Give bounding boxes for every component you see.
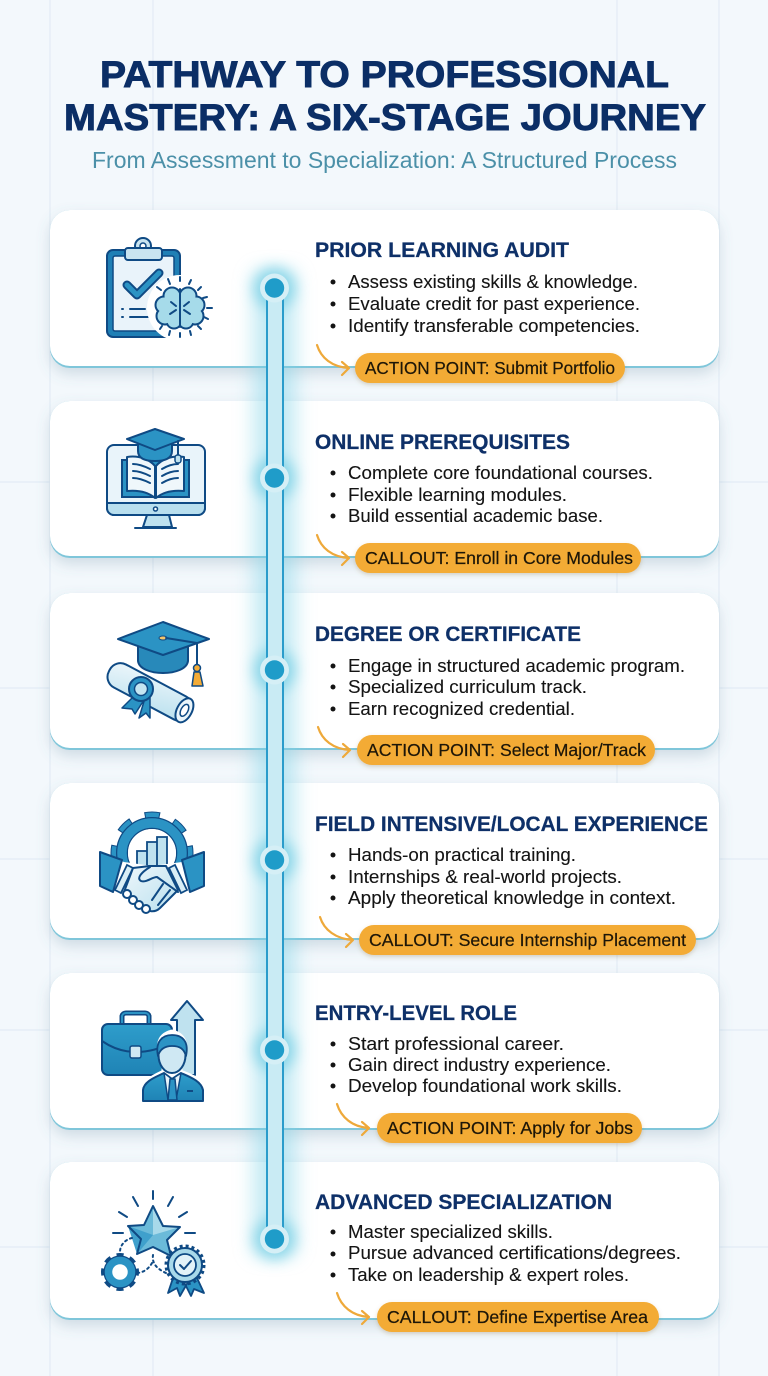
callout <box>355 543 641 573</box>
bullet list: Build essential academic base. <box>348 505 603 526</box>
callout <box>359 925 696 955</box>
bullet list <box>330 655 685 719</box>
bullet list: Engage in structured academic program. <box>348 655 685 676</box>
bullet list: Identify transferable competencies. <box>348 315 640 336</box>
bullet list: Assess existing skills & knowledge. <box>348 271 638 292</box>
bullet list <box>330 462 653 526</box>
bullet list <box>330 1221 681 1285</box>
bullet list <box>330 1033 622 1096</box>
bullet list <box>330 271 640 336</box>
bullet list: Pursue advanced certifications/degrees. <box>348 1242 681 1263</box>
timeline <box>254 267 296 1260</box>
heading: ADVANCED SPECIALIZATION <box>315 1191 612 1214</box>
bullet list: Flexible learning modules. <box>348 484 567 505</box>
heading: ONLINE PREREQUISITES <box>315 431 570 454</box>
title: PATHWAY TO PROFESSIONAL <box>100 54 669 95</box>
heading: PRIOR LEARNING AUDIT <box>315 239 569 262</box>
callout: ACTION POINT: Submit Portfolio <box>365 358 615 378</box>
bullet list: Develop foundational work skills. <box>348 1075 622 1096</box>
callout: CALLOUT: Secure Internship Placement <box>369 930 686 950</box>
bullet list: Complete core foundational courses. <box>348 462 653 483</box>
arrow <box>317 345 349 375</box>
icon: clipboard and brain <box>107 238 213 341</box>
timeline node 6 <box>260 1224 289 1254</box>
title <box>64 54 706 138</box>
bullet list <box>330 844 676 908</box>
bullet list: Evaluate credit for past experience. <box>348 293 640 314</box>
callout <box>377 1113 642 1143</box>
bullet list: Hands-on practical training. <box>348 844 576 865</box>
heading: DEGREE OR CERTIFICATE <box>315 623 581 646</box>
panel: prior learning audit <box>50 210 719 383</box>
heading: ENTRY-LEVEL ROLE <box>315 1002 517 1025</box>
timeline node 3 <box>260 656 289 684</box>
icon: monitor with book and cap <box>107 429 205 528</box>
arrow <box>320 917 353 947</box>
callout <box>377 1302 659 1332</box>
bullet list: Gain direct industry experience. <box>348 1054 611 1075</box>
panel: advanced specialization <box>50 1162 719 1332</box>
arrow <box>337 1104 369 1135</box>
callout: ACTION POINT: Select Major/Track <box>367 740 646 760</box>
bullet list: Master specialized skills. <box>348 1221 553 1242</box>
bullet list: Earn recognized credential. <box>348 698 575 719</box>
callout: ACTION POINT: Apply for Jobs <box>387 1118 633 1138</box>
timeline node 2 <box>260 464 289 492</box>
panel: field intensive <box>50 783 719 955</box>
bullet list: Apply theoretical knowledge in context. <box>348 887 676 908</box>
icon: star, gear and badge <box>104 1191 204 1296</box>
panel: online prerequisites <box>50 401 719 573</box>
timeline node 5 <box>260 1036 289 1064</box>
icon: graduation cap and diploma <box>103 622 209 725</box>
callout: CALLOUT: Define Expertise Area <box>387 1307 648 1327</box>
icon: gear and handshake <box>100 816 204 915</box>
bullet list: Start professional career. <box>348 1033 564 1054</box>
arrow <box>337 1293 369 1324</box>
callout <box>355 353 625 383</box>
panel: degree or certificate <box>50 593 719 765</box>
subtitle: From Assessment to Specialization: A Structured Process <box>92 147 677 173</box>
arrow <box>318 727 350 757</box>
timeline node 1 <box>260 274 289 302</box>
callout: CALLOUT: Enroll in Core Modules <box>365 548 633 568</box>
icon: briefcase, person and arrow <box>102 1001 204 1102</box>
arrow <box>317 535 349 565</box>
bullet list: Take on leadership & expert roles. <box>348 1264 629 1285</box>
timeline node 4 <box>260 846 289 874</box>
bullet list: Internships & real-world projects. <box>348 866 622 887</box>
bullet list: Specialized curriculum track. <box>348 676 587 697</box>
title: MASTERY: A SIX-STAGE JOURNEY <box>64 97 706 138</box>
callout <box>357 735 655 765</box>
heading: FIELD INTENSIVE/LOCAL EXPERIENCE <box>315 813 708 836</box>
panel: entry-level role <box>50 973 719 1143</box>
